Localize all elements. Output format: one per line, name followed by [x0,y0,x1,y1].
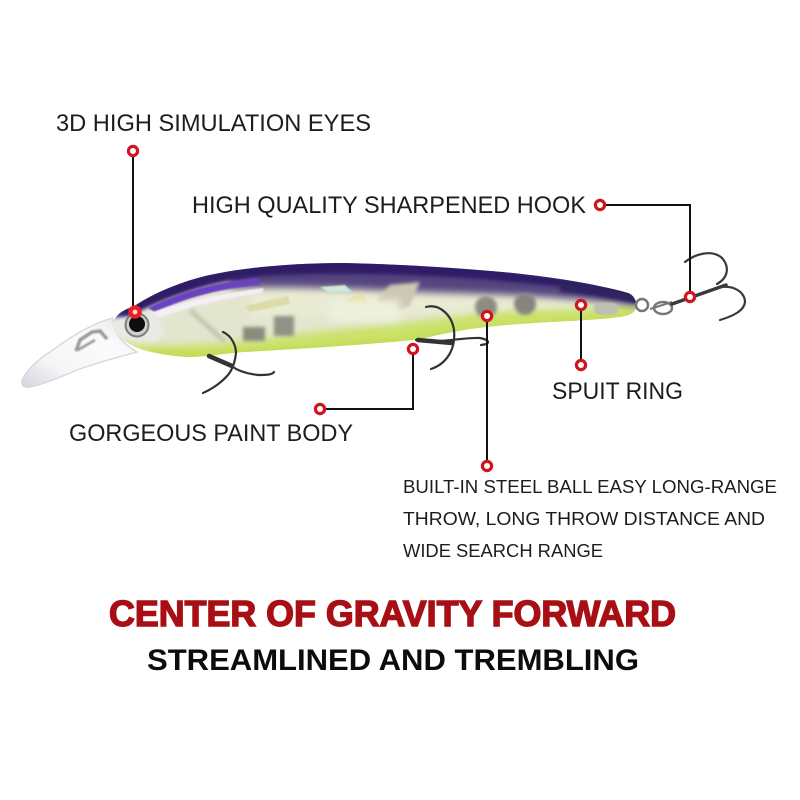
label: split ring: SPUIT RING [552,378,683,405]
label: steel ball: BUILT-IN STEEL BALL EASY LONG-RANGE [403,477,777,497]
subheading: STREAMLINED AND TREMBLING [147,644,639,677]
internal weights [243,327,265,341]
pale wash [456,300,622,316]
purple back [110,259,640,318]
iridescent patches [245,296,290,312]
label: steel ball: THROW, LONG THROW DISTANCE AND [403,509,765,529]
middle treble hook [416,306,488,369]
label: steel ball [403,477,777,561]
label: paint body: GORGEOUS PAINT BODY [69,420,353,447]
fishing lure [22,253,745,393]
eye [126,314,148,336]
head glass [113,311,164,346]
tail treble hook [672,253,745,320]
lime belly [121,302,636,357]
headline: CENTER OF GRAVITY FORWARD [109,593,676,634]
label: eyes: 3D HIGH SIMULATION EYES [56,110,371,137]
front treble hook [203,332,274,393]
label: steel ball: WIDE SEARCH RANGE [403,541,603,561]
steel balls [475,296,497,318]
lip eyelet [76,331,107,351]
label: hook: HIGH QUALITY SHARPENED HOOK [192,192,586,219]
white streak [150,288,264,318]
tail back [560,282,640,304]
leader lines [133,152,690,465]
lure lip [22,318,137,387]
violet streak [148,278,260,312]
purple back fade [230,263,640,306]
callout markers [128,146,695,471]
split ring [636,299,672,314]
lure body [113,263,636,357]
